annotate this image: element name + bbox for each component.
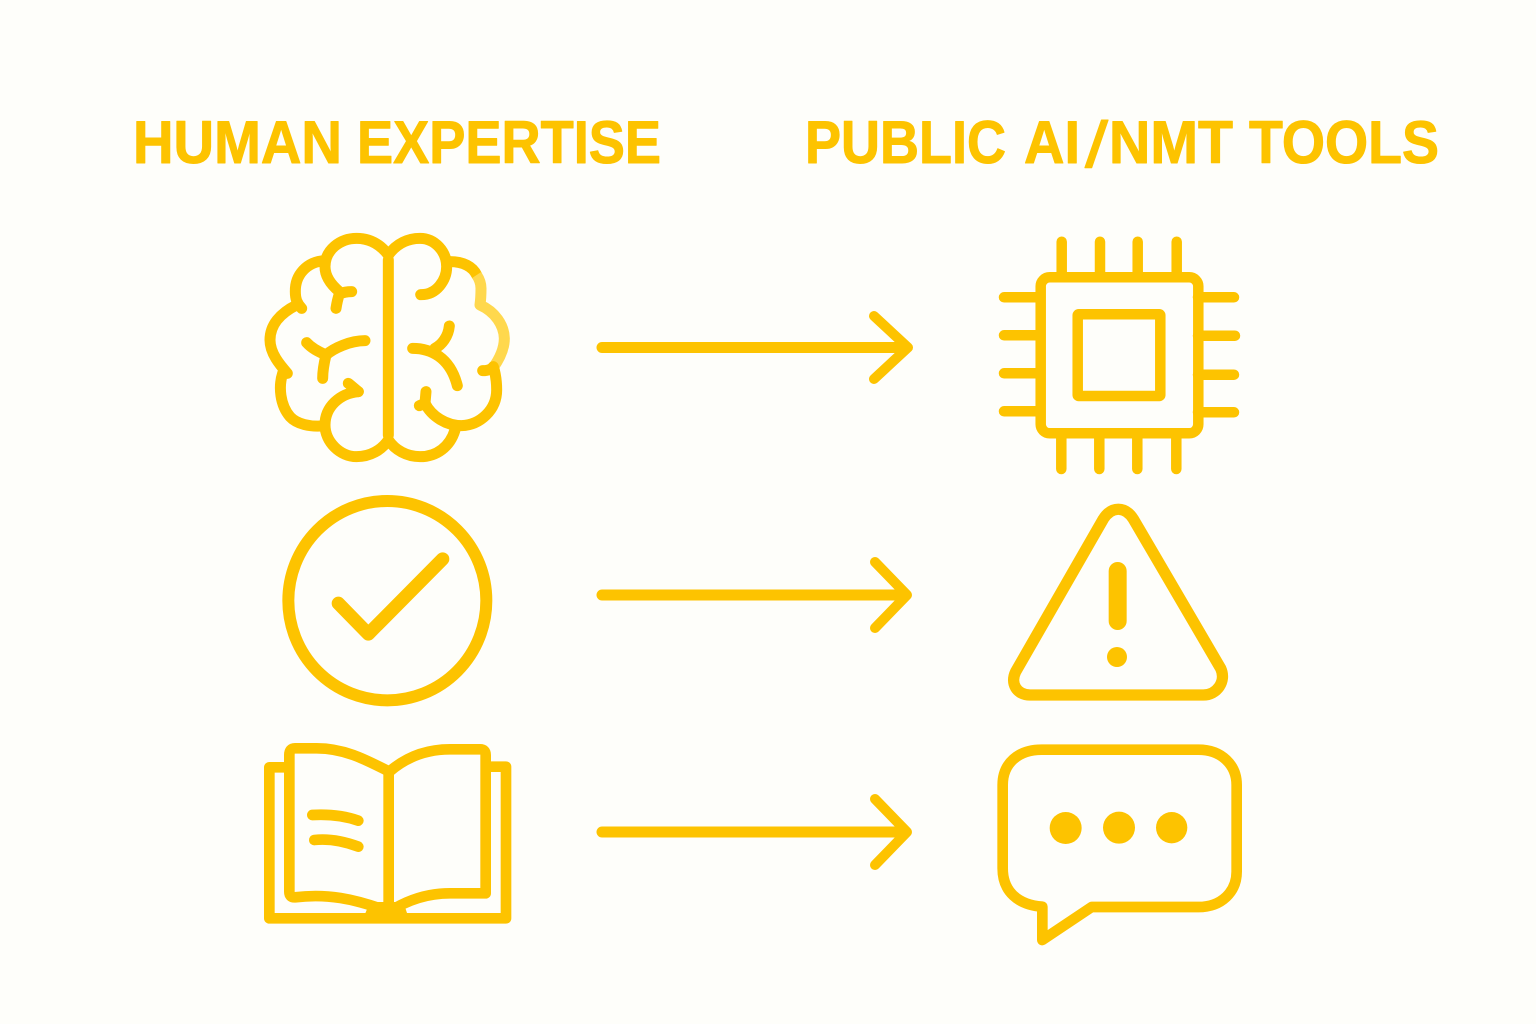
heading: public AI/NMT tools: PUBLIC xyxy=(805,109,1006,176)
icon: warning triangle xyxy=(1014,509,1222,695)
arrow: brain to chip xyxy=(602,316,908,379)
arrow: book to chat bubble xyxy=(602,799,907,865)
heading: public AI/NMT tools: NMT xyxy=(1109,109,1233,176)
icon: check mark in circle xyxy=(288,501,486,700)
heading: public AI/NMT tools: AI xyxy=(1024,109,1080,176)
heading: human expertise: HUMAN xyxy=(133,109,342,176)
icon: brain xyxy=(270,238,504,457)
icon: chat bubble with dots xyxy=(1003,750,1237,940)
heading: human expertise: EXPERTISE xyxy=(357,109,661,176)
heading: human expertise xyxy=(133,109,661,176)
heading: public AI/NMT tools xyxy=(805,108,1439,181)
heading: public AI/NMT tools: TOOLS xyxy=(1249,109,1439,176)
heading: public AI/NMT tools: / xyxy=(1085,108,1109,181)
icon: microchip xyxy=(1004,242,1235,469)
arrow: check to warning xyxy=(602,562,907,628)
icon: open book xyxy=(269,748,506,918)
